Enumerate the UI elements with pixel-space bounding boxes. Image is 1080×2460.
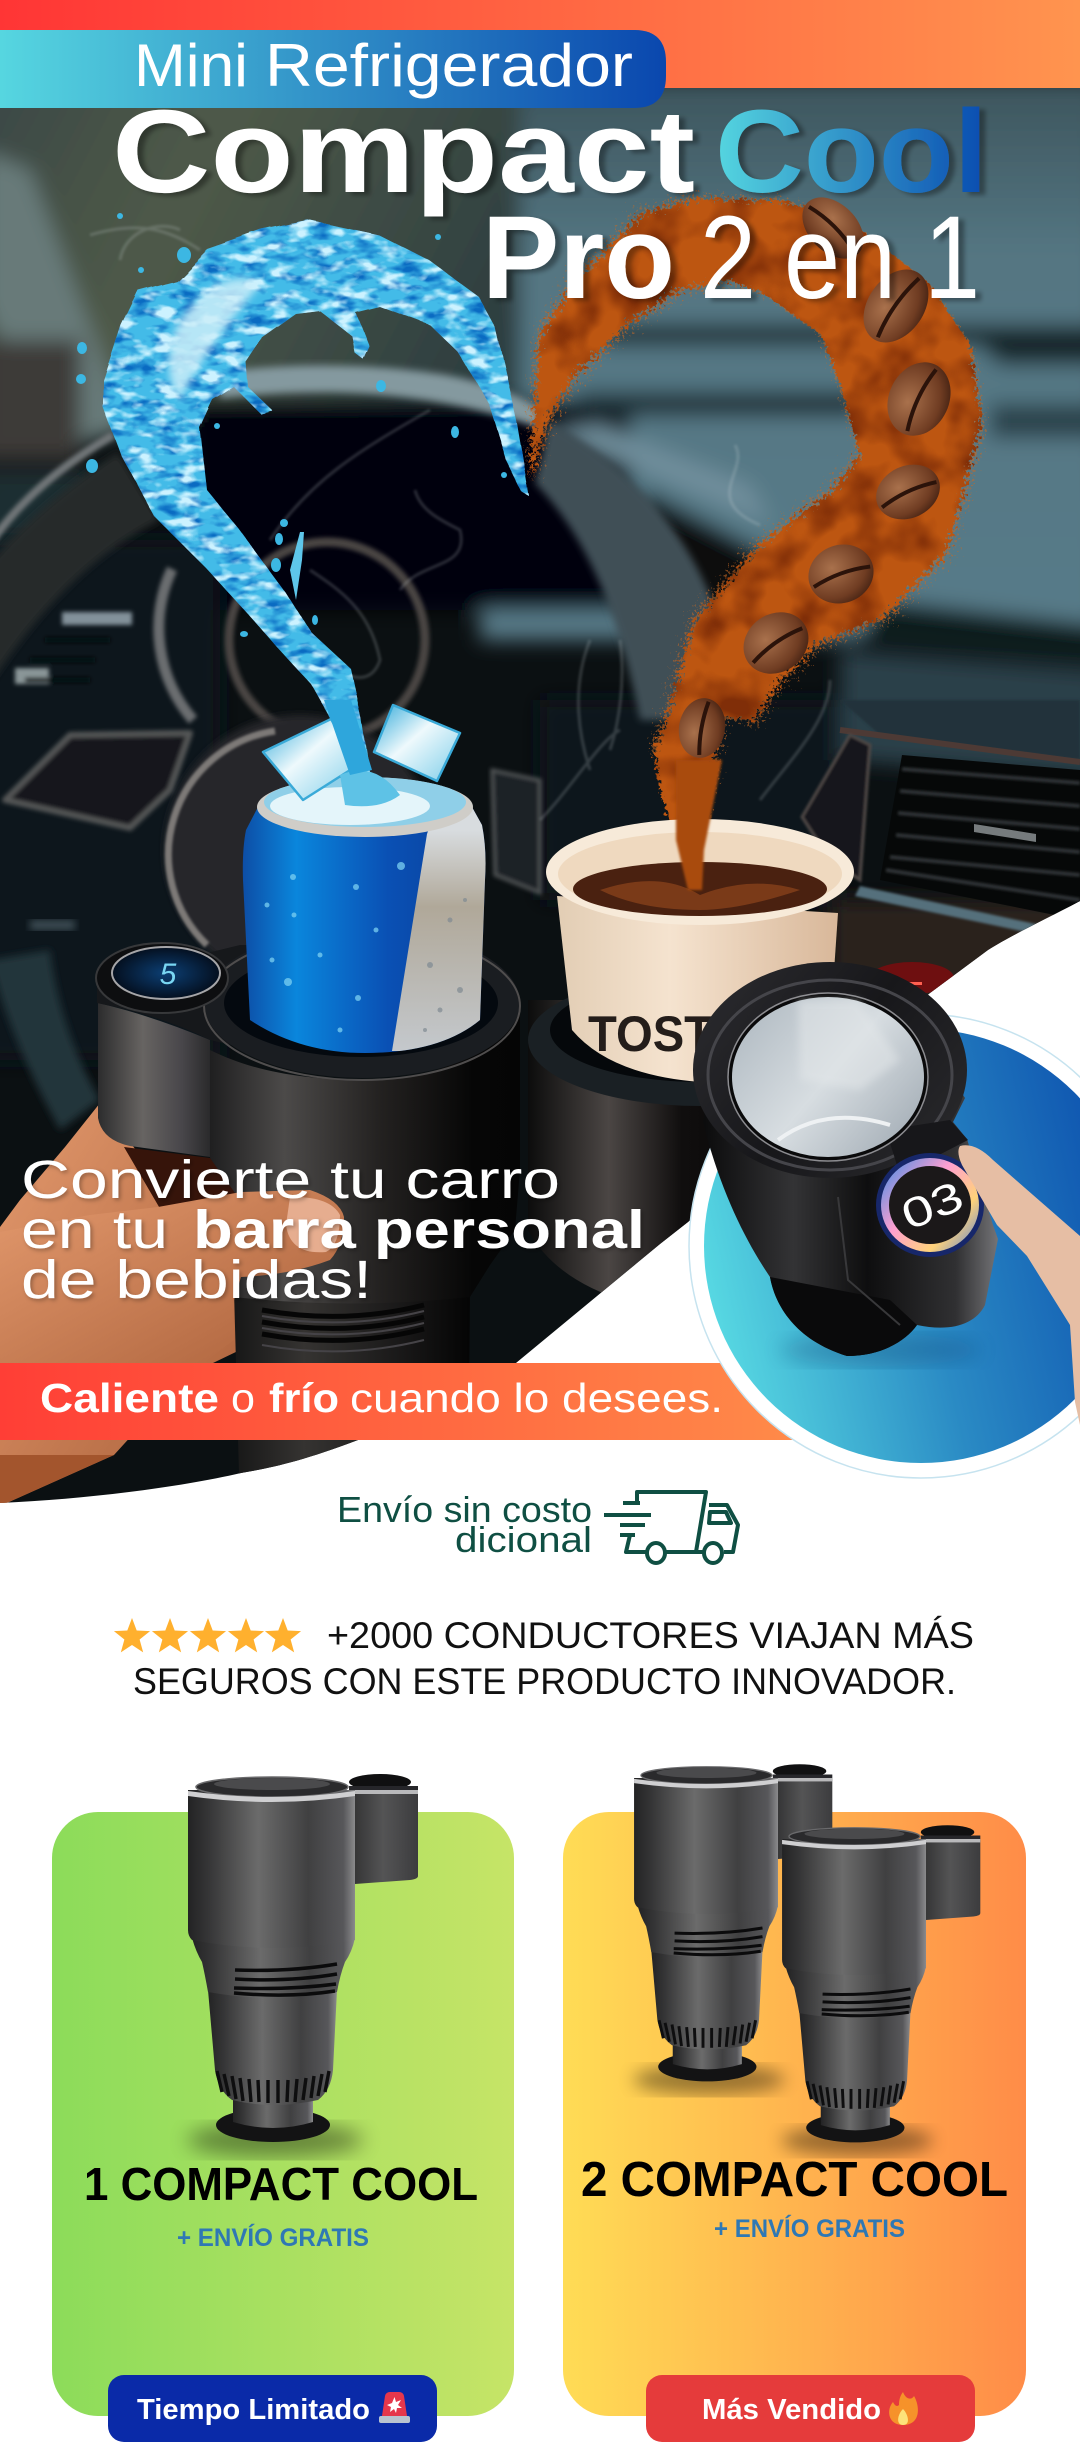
blue soda can (243, 700, 490, 1053)
product shadow on disc (780, 1334, 980, 1366)
social proof text (133, 1615, 974, 1702)
best seller button (646, 2375, 975, 2442)
main title: Pro (482, 192, 675, 324)
free shipping note: + ENVÍO GRATIS (714, 2214, 905, 2243)
instrument cluster rings (15, 542, 425, 738)
band text: o (231, 1375, 255, 1421)
hero photo (0, 80, 1080, 1510)
icon: siren (379, 2392, 410, 2423)
hero tagline: barra personal (193, 1200, 645, 1260)
coffee stream into cup (676, 760, 722, 890)
frosted glass cup opening (728, 993, 928, 1161)
mini refrigerador pill: Refrigerador (265, 32, 633, 99)
lid (693, 962, 967, 1178)
product image (187, 1774, 418, 2157)
water droplets (76, 213, 507, 637)
band text: Caliente (40, 1375, 219, 1421)
blue gradient disc (704, 1029, 1080, 1463)
limited time button (108, 2375, 437, 2442)
panel: offer 1 (52, 1774, 514, 2442)
card background (52, 1812, 514, 2416)
temperature display: 03 (895, 1172, 970, 1239)
display knob: 5 (160, 958, 177, 991)
air vent and dashboard right (802, 700, 1080, 994)
panel: offer 2 (563, 1764, 1026, 2442)
free shipping note: + ENVÍO GRATIS (177, 2223, 369, 2252)
steam wisps (90, 226, 830, 820)
mini refrigerador pill (0, 30, 666, 108)
cup holder product closeup (693, 962, 998, 1356)
hand thumb (0, 1147, 344, 1506)
steering wheel rim (0, 365, 720, 1130)
icon: flame (889, 2392, 918, 2425)
icon: delivery truck (604, 1492, 738, 1563)
second cup holder and coffee cup (528, 760, 872, 1310)
steering wheel control panel (5, 733, 540, 930)
temperature display (876, 1153, 984, 1257)
feature band (0, 1363, 800, 1440)
free shipping text (337, 1489, 592, 1560)
water splash arc (76, 213, 530, 790)
can rim with ice (257, 777, 473, 837)
band text: cuando lo desees. (350, 1375, 723, 1421)
hero tagline (21, 1150, 645, 1310)
band text: frío (269, 1375, 339, 1421)
main title: 2 en 1 (700, 192, 980, 324)
main title: Compact (112, 86, 695, 218)
band text (40, 1375, 723, 1421)
display knob (96, 943, 228, 1013)
star rating (114, 1618, 301, 1652)
offer title: 2 COMPACT COOL (581, 2153, 1008, 2207)
best seller button: Más Vendido (702, 2394, 881, 2426)
ice cubes (263, 719, 358, 800)
mini refrigerador pill: Mini (134, 32, 248, 99)
product image front (781, 1825, 980, 2155)
white disc behind product (689, 1014, 1080, 1478)
hero tagline: en tu (21, 1200, 168, 1260)
social proof text: SEGUROS CON ESTE PRODUCTO INNOVADOR. (133, 1661, 956, 1702)
free shipping text: dicional (455, 1519, 592, 1560)
blurred dashboard background (0, 80, 1080, 1060)
main title (112, 86, 988, 324)
offer title: 1 COMPACT COOL (84, 2158, 478, 2210)
coffee powder arc (530, 186, 981, 886)
pointing finger (958, 1145, 1080, 1425)
limited time button: Tiempo Limitado (137, 2394, 370, 2426)
social proof text: +2000 CONDUCTORES VIAJAN MÁS (327, 1615, 974, 1656)
top gradient bar (0, 0, 1080, 90)
hero tagline: de bebidas! (21, 1250, 372, 1310)
hand palm (0, 1103, 240, 1506)
first cup holder body (96, 928, 520, 1510)
card background (563, 1812, 1026, 2416)
hero tagline: Convierte tu carro (21, 1150, 560, 1210)
main title: Cool (715, 86, 988, 218)
water stream into can (324, 700, 372, 775)
TOST cup label: TOST (588, 1006, 713, 1062)
coffee beans (674, 186, 962, 762)
free shipping text: Envío sin costo (337, 1489, 592, 1530)
product image back (633, 1764, 832, 2094)
